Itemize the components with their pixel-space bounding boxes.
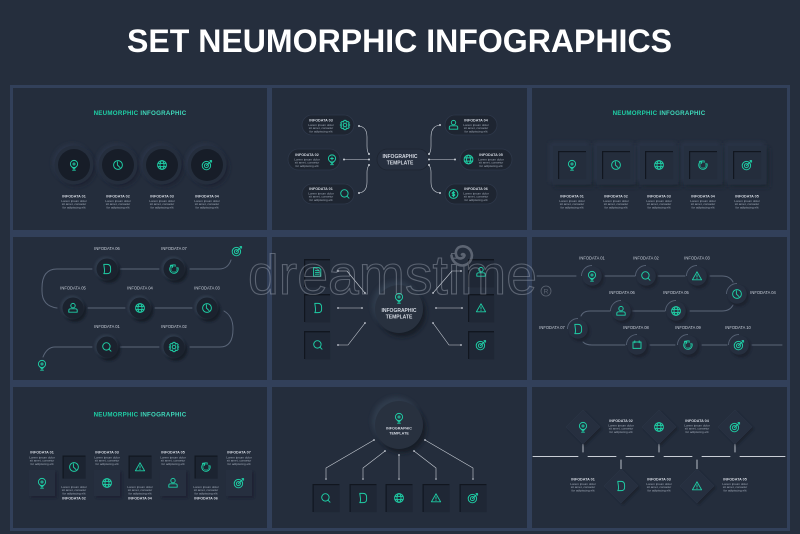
label 2: Lorem ipsum dolor (105, 199, 131, 203)
label 4: for adipiscing elit (691, 205, 715, 209)
upper labels: for adipiscing elit (227, 462, 251, 466)
node 04 (128, 296, 154, 322)
circle 2 (97, 144, 140, 186)
node labels: INFODATA 10 (725, 325, 751, 330)
square 5 (460, 484, 487, 512)
center circle: TEMPLATE (386, 314, 413, 320)
lower labels (61, 485, 219, 500)
lower labels: for adipiscing elit (128, 491, 152, 495)
label 1: for adipiscing elit (560, 205, 584, 209)
pill 04: INFODATA 04 (464, 118, 489, 122)
pill 04 (445, 115, 497, 135)
center pill: TEMPLATE (387, 160, 414, 166)
node labels: INFODATA 03 (194, 286, 220, 290)
lower labels: for adipiscing elit (194, 491, 218, 495)
node labels (60, 246, 220, 329)
node labels: INFODATA 03 (684, 256, 710, 260)
upper labels: sit amet, consetur (227, 459, 251, 463)
label 3: for adipiscing elit (647, 205, 671, 209)
pill 05 (460, 149, 512, 170)
label 5: for adipiscing elit (735, 205, 759, 209)
left squares (304, 259, 330, 359)
label 5: sit amet, consetur (735, 202, 759, 206)
lower labels: INFODATA 06 (194, 496, 218, 500)
node 03 (194, 296, 220, 322)
lower labels: for adipiscing elit (647, 488, 671, 492)
right squares (468, 259, 494, 359)
watermark: R (544, 288, 549, 296)
label 4: sit amet, consetur (691, 202, 715, 206)
pill 02: INFODATA 02 (295, 153, 319, 157)
lower labels: Lorem ipsum dolor (646, 482, 672, 486)
square 3 (386, 484, 413, 512)
panel: top circle tree (272, 387, 527, 528)
label 3: Lorem ipsum dolor (149, 199, 175, 203)
center pill (377, 149, 429, 170)
label 2 (603, 194, 629, 209)
pill 02: for adipiscing elit (295, 164, 319, 168)
label 1: INFODATA 01 (560, 194, 584, 198)
node labels: INFODATA 01 (579, 256, 605, 260)
label 5 (734, 194, 760, 209)
upper labels: Lorem ipsum dolor (160, 456, 186, 460)
node labels: INFODATA 01 (94, 324, 120, 329)
node 05 (666, 300, 688, 324)
icon: target end (232, 247, 242, 256)
node labels: INFODATA 07 (539, 325, 565, 330)
upper labels: INFODATA 02 (609, 419, 633, 423)
diamond 5 (718, 410, 754, 446)
panel: alternating squares (13, 387, 267, 528)
upper labels: Lorem ipsum dolor (684, 424, 710, 428)
pill 03: Lorem ipsum dolor (308, 123, 334, 127)
lower labels: sit amet, consetur (723, 485, 747, 489)
node 06 (610, 300, 633, 324)
pill 04: Lorem ipsum dolor (463, 123, 489, 127)
lower labels: sit amet, consetur (571, 485, 595, 489)
label 2: for adipiscing elit (604, 205, 628, 209)
pill 03: for adipiscing elit (309, 129, 333, 133)
lower labels: Lorem ipsum dolor (193, 485, 219, 489)
node 06 (94, 256, 120, 283)
connectors (343, 124, 456, 194)
road (537, 276, 782, 345)
node 01 (94, 334, 120, 361)
connectors (325, 439, 474, 480)
square 5 (160, 470, 188, 498)
upper labels: for adipiscing elit (95, 462, 119, 466)
node labels: INFODATA 08 (623, 325, 649, 330)
pill 01: for adipiscing elit (309, 198, 333, 202)
upper labels: INFODATA 07 (227, 450, 251, 454)
lower labels: INFODATA 05 (723, 478, 747, 482)
panel: circles infographic (13, 88, 267, 230)
heading: NEUMORPHIC INFOGRAPHIC (613, 110, 706, 117)
lower labels: sit amet, consetur (62, 488, 86, 492)
lower labels: for adipiscing elit (723, 488, 747, 492)
square 2 (594, 143, 638, 187)
square 5 (725, 143, 769, 187)
panel: central circle (272, 237, 527, 380)
upper labels: Lorem ipsum dolor (94, 456, 120, 460)
lower labels: Lorem ipsum dolor (722, 482, 748, 486)
upper labels: INFODATA 04 (685, 419, 710, 423)
square 4 (128, 456, 152, 479)
label 3: INFODATA 03 (647, 194, 671, 198)
node labels: INFODATA 04 (750, 290, 776, 295)
label 4: Lorem ipsum dolor (690, 199, 716, 203)
lower labels: for adipiscing elit (571, 488, 595, 492)
panel: branching timeline (532, 237, 787, 380)
diamond 1 (566, 410, 602, 446)
timeline (533, 442, 785, 471)
center pill: INFOGRAPHIC (382, 154, 418, 160)
pill 05: for adipiscing elit (479, 164, 503, 168)
label 3: sit amet, consetur (647, 202, 671, 206)
node 09 (678, 334, 700, 358)
panel: squares infographic (532, 88, 787, 230)
square 1 (312, 484, 340, 512)
label 4 (690, 194, 716, 209)
road (42, 260, 233, 357)
upper labels: sit amet, consetur (161, 459, 185, 463)
label 4: Lorem ipsum dolor (194, 199, 220, 203)
node labels: INFODATA 05 (663, 290, 689, 295)
label 4: INFODATA 04 (195, 194, 220, 198)
center circle (372, 397, 426, 453)
upper labels: sit amet, consetur (685, 427, 709, 431)
label 3 (646, 194, 672, 209)
pill 06: Lorem ipsum dolor (463, 192, 489, 196)
pill 03: INFODATA 03 (309, 118, 333, 122)
watermark: dreamstime (248, 243, 537, 306)
pill 01: Lorem ipsum dolor (308, 192, 334, 196)
pill 02 (288, 149, 340, 170)
label 2 (105, 194, 131, 209)
label 2: for adipiscing elit (106, 205, 130, 209)
label 1: Lorem ipsum dolor (61, 199, 87, 203)
node labels: INFODATA 06 (94, 246, 120, 251)
label 3: sit amet, consetur (150, 202, 174, 206)
node labels (539, 256, 776, 330)
pill 04: sit amet, consetur (464, 126, 488, 130)
pill 01: INFODATA 01 (309, 187, 333, 191)
square 7 (226, 470, 254, 498)
node 03 (686, 266, 709, 288)
lower labels: INFODATA 03 (647, 478, 671, 482)
upper labels: INFODATA 05 (161, 450, 185, 454)
lower labels: INFODATA 01 (571, 478, 595, 482)
panel: diamond timeline (532, 387, 787, 528)
upper labels (29, 450, 252, 466)
pill 04: for adipiscing elit (464, 129, 488, 133)
node 01 (582, 266, 604, 288)
node 10 (728, 334, 751, 358)
node labels: INFODATA 07 (161, 246, 187, 251)
diamond 2 (604, 469, 640, 505)
label 4: sit amet, consetur (195, 202, 219, 206)
upper labels: for adipiscing elit (609, 430, 633, 434)
circle 1 (53, 144, 96, 186)
pill 06 (445, 184, 497, 204)
lower labels: for adipiscing elit (62, 491, 86, 495)
heading: NEUMORPHIC INFOGRAPHIC (94, 412, 187, 418)
label 4: for adipiscing elit (195, 205, 219, 209)
square 4 (422, 484, 450, 512)
node 04 (726, 284, 749, 306)
node labels: INFODATA 04 (127, 286, 153, 290)
square 4 (681, 143, 725, 187)
pill 06: INFODATA 06 (464, 187, 488, 191)
pill 03 (302, 115, 354, 135)
label 2: INFODATA 02 (604, 194, 628, 198)
pill 01 (302, 184, 354, 204)
label 2: Lorem ipsum dolor (603, 199, 629, 203)
pill 06: sit amet, consetur (464, 195, 488, 199)
panel: snake timeline (13, 237, 267, 380)
node 07 (568, 318, 590, 342)
heading: NEUMORPHIC INFOGRAPHIC (94, 110, 187, 117)
upper labels: sit amet, consetur (95, 459, 119, 463)
label 3 (149, 194, 175, 209)
upper labels: Lorem ipsum dolor (608, 424, 634, 428)
node 08 (626, 334, 649, 358)
label 2: INFODATA 02 (106, 194, 130, 198)
lower labels: sit amet, consetur (194, 488, 218, 492)
label 1: INFODATA 01 (62, 194, 86, 198)
diamond 3 (642, 410, 678, 446)
node labels: INFODATA 02 (633, 256, 659, 260)
node 02 (636, 266, 658, 288)
upper labels: for adipiscing elit (685, 430, 709, 434)
node labels: INFODATA 09 (675, 325, 701, 330)
pill 05: INFODATA 05 (479, 153, 503, 157)
lower labels: Lorem ipsum dolor (570, 482, 596, 486)
center circle: INFOGRAPHIC (382, 308, 417, 314)
label 2: sit amet, consetur (106, 202, 130, 206)
node 02 (162, 334, 188, 361)
center circle (372, 281, 426, 337)
label 1: sit amet, consetur (62, 202, 86, 206)
label 5: INFODATA 05 (735, 194, 759, 198)
label 4: INFODATA 04 (691, 194, 716, 198)
label 1 (61, 194, 87, 209)
lower labels: sit amet, consetur (128, 488, 152, 492)
square 3 (637, 143, 681, 187)
connectors (337, 270, 463, 346)
title: SET NEUMORPHIC INFOGRAPHICS (127, 23, 672, 59)
pill 02: sit amet, consetur (295, 161, 319, 165)
label 2: sit amet, consetur (604, 202, 628, 206)
node 07 (162, 256, 188, 283)
upper labels: INFODATA 03 (95, 450, 119, 454)
circle 4 (186, 144, 228, 186)
node 05 (60, 296, 86, 322)
upper labels: Lorem ipsum dolor (29, 456, 55, 460)
upper labels: for adipiscing elit (161, 462, 185, 466)
icon: start pin (38, 360, 46, 370)
pill 05: sit amet, consetur (479, 161, 503, 165)
square 6 (194, 456, 218, 479)
lower labels: Lorem ipsum dolor (127, 485, 153, 489)
upper labels: sit amet, consetur (609, 427, 633, 431)
square 3 (94, 470, 122, 498)
node labels: INFODATA 02 (161, 324, 187, 329)
pill 02: Lorem ipsum dolor (294, 158, 320, 162)
upper labels: INFODATA 01 (30, 450, 54, 454)
label 1: Lorem ipsum dolor (559, 199, 585, 203)
label 4 (194, 194, 220, 209)
label 1 (559, 194, 585, 209)
upper labels: Lorem ipsum dolor (226, 456, 252, 460)
lower labels: sit amet, consetur (647, 485, 671, 489)
square 1 (550, 143, 594, 187)
label 3: for adipiscing elit (150, 205, 174, 209)
label 1: sit amet, consetur (560, 202, 584, 206)
pill 05: Lorem ipsum dolor (478, 158, 504, 162)
center circle: INFOGRAPHIC (386, 426, 412, 430)
pill 03: sit amet, consetur (309, 126, 333, 130)
square 2 (62, 456, 86, 479)
upper labels: for adipiscing elit (30, 462, 54, 466)
label 1: for adipiscing elit (62, 205, 86, 209)
panel: pill mind map (272, 88, 527, 230)
square 1 (29, 470, 57, 498)
node labels: INFODATA 05 (60, 286, 86, 290)
label 3: Lorem ipsum dolor (646, 199, 672, 203)
upper labels (608, 419, 710, 434)
label 5: Lorem ipsum dolor (734, 199, 760, 203)
pill 06: for adipiscing elit (464, 198, 488, 202)
lower labels: Lorem ipsum dolor (61, 485, 87, 489)
pill 01: sit amet, consetur (309, 195, 333, 199)
circle 3 (141, 144, 184, 186)
diamond 4 (680, 469, 716, 505)
lower labels (570, 478, 748, 492)
upper labels: sit amet, consetur (30, 459, 54, 463)
node labels: INFODATA 06 (609, 290, 635, 295)
center circle: TEMPLATE (389, 432, 409, 436)
label 3: INFODATA 03 (150, 194, 174, 198)
lower labels: INFODATA 04 (128, 496, 153, 500)
square 2 (350, 484, 377, 512)
lower labels: INFODATA 02 (62, 496, 86, 500)
